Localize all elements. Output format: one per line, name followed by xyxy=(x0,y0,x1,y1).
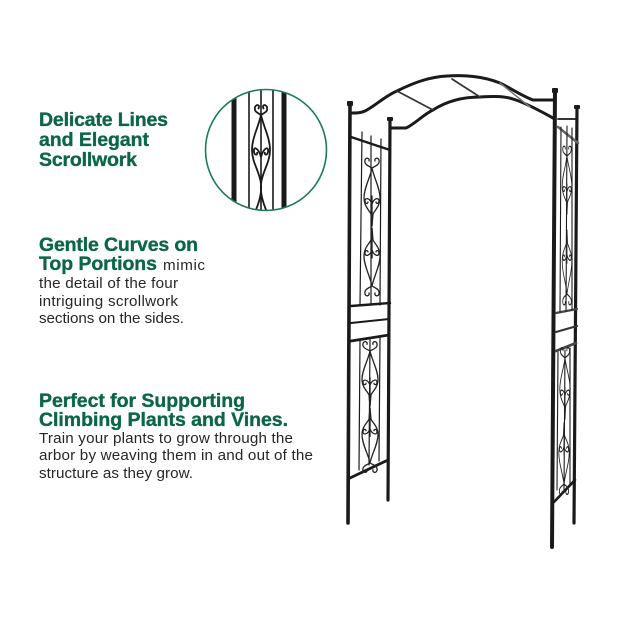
heading: delicate lines: Scrollwork xyxy=(39,149,137,171)
text block: perfect for supporting: structure as they grow. xyxy=(39,465,193,482)
text block: perfect for supporting: Train your plants to grow through the xyxy=(39,430,293,447)
text block: gentle curves: sections on the sides. xyxy=(39,310,184,327)
arch top rails xyxy=(350,76,553,128)
right scrollwork ornaments xyxy=(559,146,572,494)
text block: gentle curves xyxy=(39,234,205,327)
text block: perfect for supporting: arbor by weaving them in and out of the xyxy=(39,447,313,464)
text block: gentle curves: the detail of the four xyxy=(39,275,178,292)
heading: delicate lines: Delicate Lines xyxy=(39,109,168,131)
arbor illustration xyxy=(347,76,580,547)
posts xyxy=(348,90,577,547)
heading: delicate lines: and Elegant xyxy=(39,129,150,151)
text block: perfect for supporting: Climbing Plants and Vines. xyxy=(39,409,288,431)
heading: delicate lines xyxy=(39,109,168,171)
text block: gentle curves: Top Portions xyxy=(39,253,157,275)
text block: perfect for supporting xyxy=(39,390,313,482)
text block: gentle curves: Gentle Curves on xyxy=(39,234,198,256)
text block: perfect for supporting: Perfect for Supporting xyxy=(39,390,245,412)
text block: gentle curves: intriguing scrollwork xyxy=(39,293,178,310)
post caps xyxy=(347,88,580,121)
left panel rails and pickets xyxy=(350,132,390,478)
text block: gentle curves: mimic xyxy=(163,257,205,274)
detail circle: scrollwork close-up xyxy=(206,85,326,215)
right panel rails and pickets xyxy=(554,119,578,502)
left scrollwork ornaments xyxy=(362,158,380,472)
